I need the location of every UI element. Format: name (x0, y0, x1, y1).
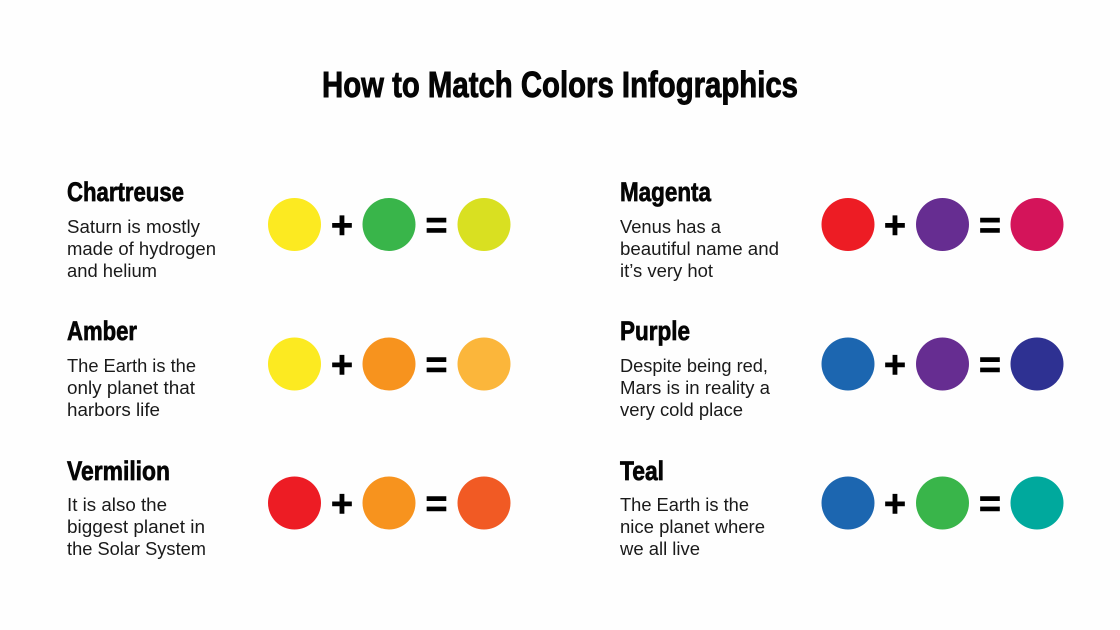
text block: Purple description (620, 356, 771, 420)
text block: Vermilion description: the Solar System (67, 539, 206, 559)
color equation: yellow plus orange equals amber: + (331, 344, 353, 386)
heading: Amber: Amber (67, 316, 137, 346)
text block: Purple description: very cold place (620, 400, 743, 420)
panel: Vermilion (67, 456, 510, 559)
text block: Amber description: The Earth is the (67, 356, 196, 376)
color equation: yellow plus orange equals amber (268, 338, 510, 390)
text block: Amber description (67, 356, 196, 420)
color equation: yellow plus green equals chartreuse: + (331, 205, 353, 247)
heading: Purple: Purple (620, 316, 690, 346)
text block: Teal description: The Earth is the (620, 495, 749, 515)
color equation: yellow plus green equals chartreuse (268, 198, 510, 251)
text block: Chartreuse description: Saturn is mostly (67, 217, 200, 237)
text block: Teal description: we all live (619, 539, 700, 559)
color equation: blue plus purple equals indigo: + (884, 344, 906, 386)
text block: Chartreuse description: made of hydrogen (67, 239, 216, 259)
text block: Amber description: only planet that (67, 378, 195, 398)
text block: Chartreuse description (67, 217, 216, 281)
color equation: red plus orange equals vermilion (268, 476, 510, 530)
panel: Purple (620, 316, 1064, 420)
panel: Amber (67, 316, 510, 420)
text block: Purple description: Mars is in reality a (620, 378, 771, 398)
panel: Chartreuse (67, 177, 510, 281)
text block: Magenta description: it’s very hot (620, 261, 713, 281)
color equation: red plus purple equals magenta (822, 198, 1064, 251)
panel: Teal (619, 456, 1064, 559)
text block: Magenta description: Venus has a (620, 217, 722, 237)
color equation: blue plus purple equals indigo (822, 338, 1064, 390)
color equation: red plus purple equals magenta: + (884, 205, 906, 247)
color equation: blue plus green equals teal: = (979, 484, 1001, 526)
color equation: blue plus green equals teal (822, 476, 1064, 530)
color equation: blue plus purple equals indigo: = (979, 344, 1001, 386)
panel: Magenta (620, 177, 1064, 281)
text block: Teal description (619, 495, 765, 559)
heading: Magenta: Magenta (620, 177, 711, 207)
color equation: red plus orange equals vermilion: = (425, 484, 448, 526)
text block: Teal description: nice planet where (620, 517, 765, 537)
text block: Magenta description: beautiful name and (620, 239, 779, 259)
color equation: yellow plus green equals chartreuse: = (425, 205, 448, 247)
text block: Vermilion description (67, 495, 206, 559)
text block: Vermilion description: biggest planet in (67, 517, 205, 537)
text block: Amber description: harbors life (67, 400, 160, 420)
color equation: red plus orange equals vermilion: + (331, 484, 353, 526)
heading: Teal: Teal (620, 456, 664, 486)
color equation: red plus purple equals magenta: = (979, 205, 1001, 247)
heading: Chartreuse: Chartreuse (67, 177, 184, 207)
color equation: blue plus green equals teal: + (884, 484, 906, 526)
text block: Vermilion description: It is also the (67, 495, 167, 515)
text block: Chartreuse description: and helium (67, 261, 157, 281)
heading: Vermilion: Vermilion (67, 456, 170, 486)
color equation: yellow plus orange equals amber: = (425, 344, 448, 386)
text block: Purple description: Despite being red, (620, 356, 768, 376)
title: How to Match Colors Infographics (322, 64, 798, 105)
text block: Magenta description (620, 217, 779, 281)
